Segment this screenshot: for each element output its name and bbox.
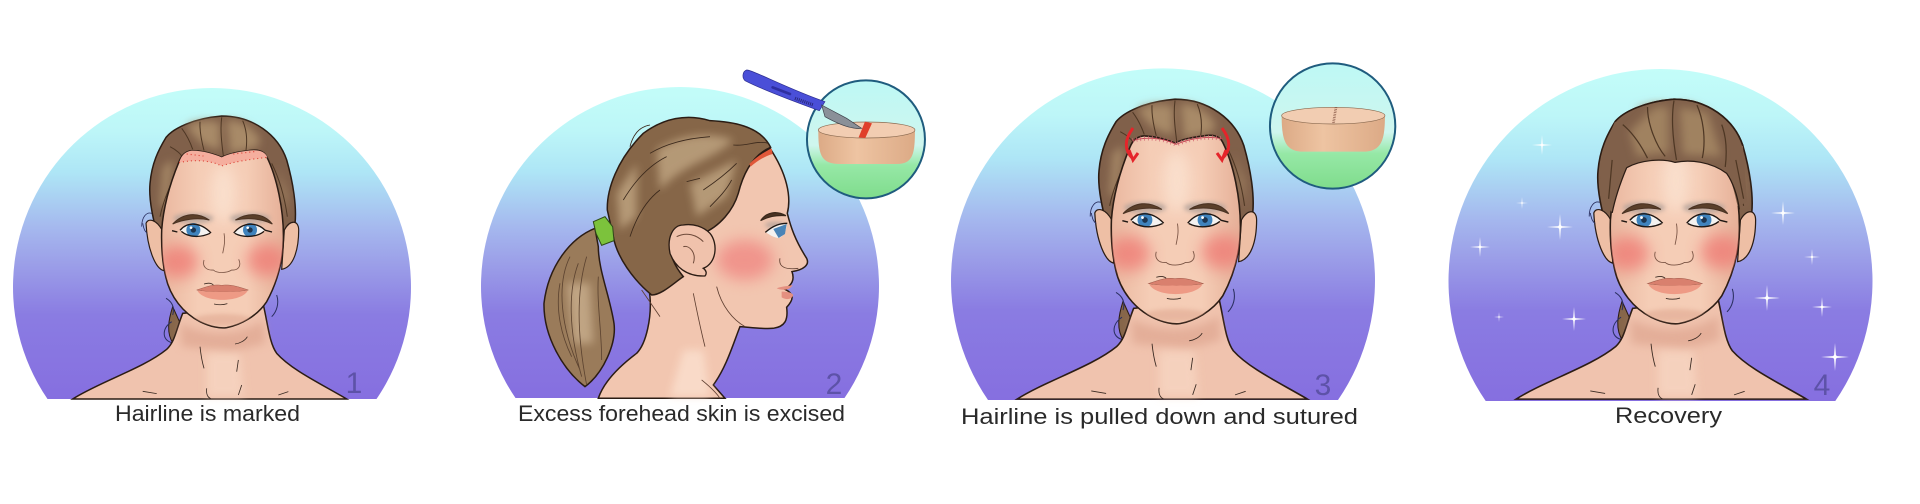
panel 4: recovery (1448, 69, 1872, 428)
panel 2 step number: 2 (826, 368, 842, 401)
panel 4 sparkles (1470, 135, 1849, 371)
panel 3 caption: Hairline is pulled down and sutured (961, 404, 1358, 429)
panel 1 head illustration (73, 116, 347, 399)
panel 4 background dome (1448, 69, 1872, 401)
panel 1: hairline is marked (13, 88, 411, 426)
red arrows: hairline pulled down (1126, 128, 1229, 160)
panel 2 profile head illustration (544, 117, 807, 398)
panel 3 magnified suture inset (1270, 63, 1395, 189)
panel 3 step number: 3 (1315, 369, 1331, 402)
panel 4 caption: Recovery (1615, 403, 1722, 428)
panel 4 step number: 4 (1814, 369, 1830, 402)
panel 1 caption: Hairline is marked (115, 401, 300, 426)
panel 3 background dome (951, 68, 1375, 400)
panel 2 caption: Excess forehead skin is excised (518, 401, 845, 426)
panel 3 head illustration (1017, 99, 1307, 399)
infographic: forehead reduction steps (13, 62, 1872, 428)
panel 3: hairline is pulled down and sutured (951, 63, 1395, 429)
panel 2 magnified incision inset (807, 80, 925, 198)
panel 2 background dome (481, 87, 879, 398)
icon: scalpel (743, 70, 862, 128)
panel 1 step number: 1 (346, 367, 362, 400)
panel 2: excess forehead skin is excised (481, 70, 925, 426)
panel 1 background dome (13, 88, 411, 399)
panel 4 head illustration (1516, 99, 1806, 399)
